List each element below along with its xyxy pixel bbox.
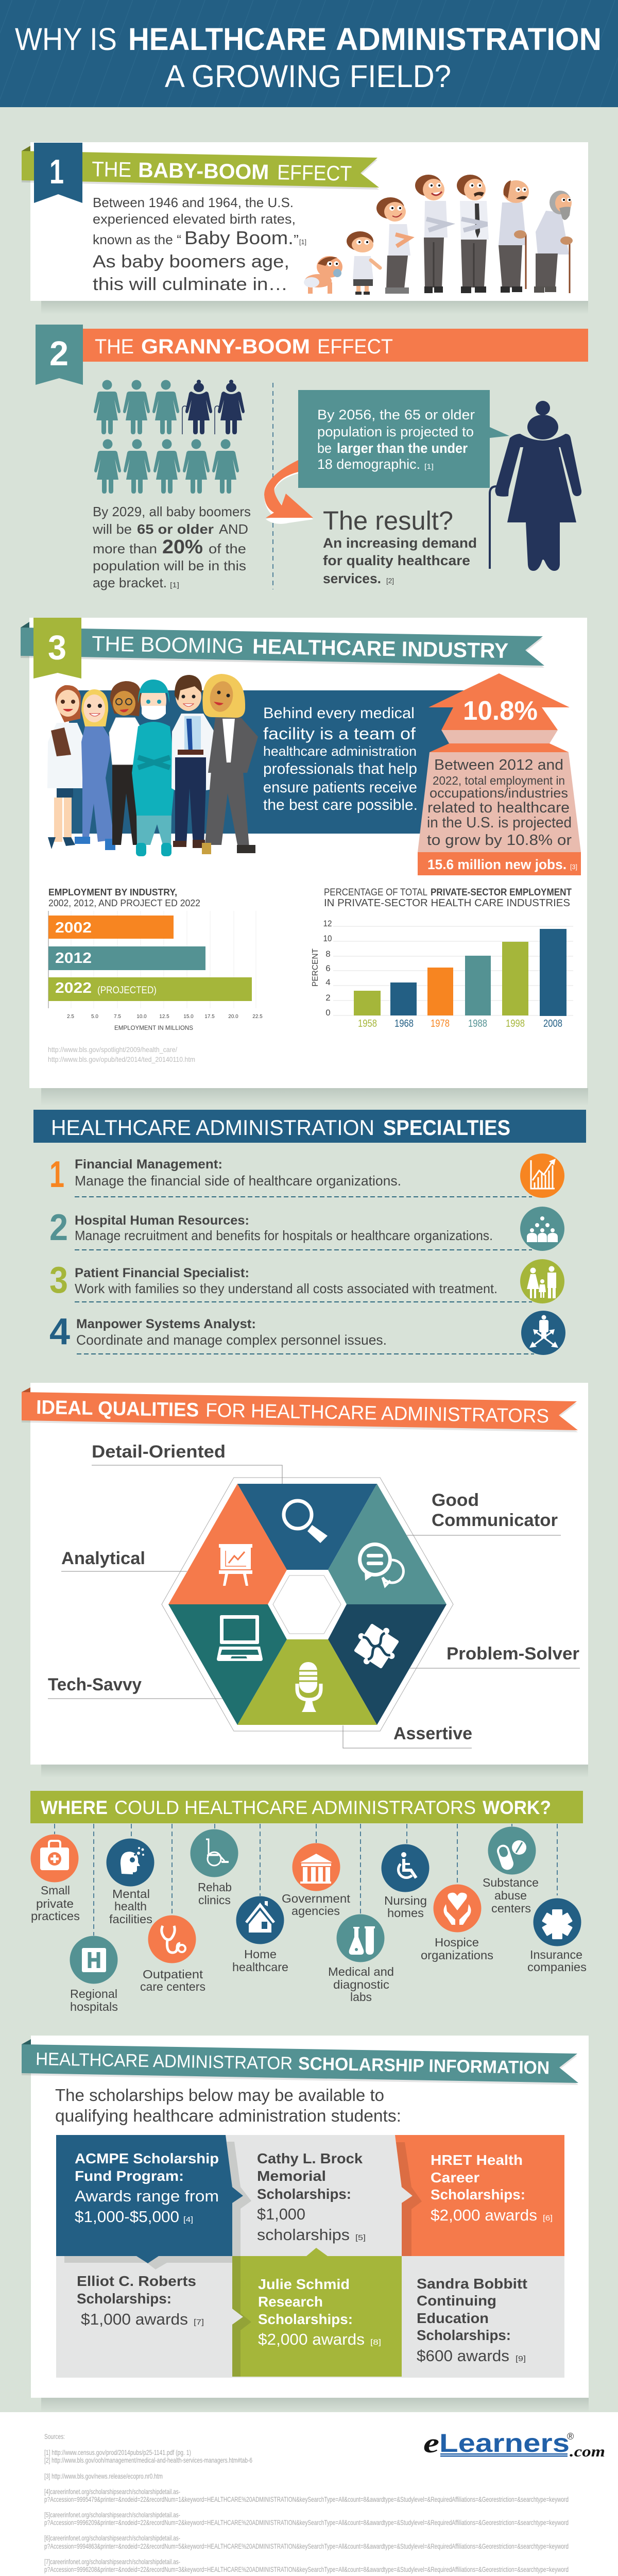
cell: Cathy L. Brock: Scholarships: (257, 2186, 351, 2202)
specialty 2 (49, 1207, 564, 1251)
specialty 4: Manpower Systems Analyst: (76, 1317, 256, 1331)
cell: Julie Schmid: Scholarships: (258, 2311, 353, 2327)
logo: eLearners.com: e (423, 2428, 439, 2459)
arrow: curved orange (264, 460, 313, 524)
ribbon: baby-boom heading: EFFECT (277, 160, 352, 185)
arrow: growth 10.8%: related to healthcare (427, 800, 570, 816)
item: insurance companies: companies (527, 1960, 587, 1974)
blue backdrop with text (69, 690, 465, 834)
chart source links: http://www.bls.gov/spotlight/2009/health_care/ (48, 1045, 177, 1054)
text: by 2029: 65 or older (137, 521, 214, 537)
labels and leader lines: Communicator (432, 1511, 558, 1530)
cell: Sandra Bobbitt: $600 awards (417, 2347, 509, 2365)
cell: Julie Schmid: [8] (370, 2338, 381, 2347)
scholarship grid (56, 2135, 564, 2378)
cell: HRET: [6] (543, 2214, 553, 2223)
cell: ACMPE: $1,000-$5,000 (75, 2208, 179, 2226)
cell: HRET: $2,000 awards (431, 2206, 537, 2224)
text: by 2029: of the (209, 541, 246, 556)
text: by 2029: age bracket. (93, 575, 167, 590)
icon: microphone (297, 1662, 321, 1712)
illustration: medical team (47, 674, 258, 856)
blue backdrop with text: healthcare administration (263, 743, 417, 759)
text: scholarship intro: The scholarships below may be available to (55, 2086, 384, 2105)
ribbon: ideal qualities heading: IDEAL QUALITIES (36, 1397, 199, 1421)
cell: ACMPE (56, 2135, 243, 2263)
blue backdrop with text: Behind every medical (263, 705, 415, 722)
cell: Elliot C. Roberts: Elliot C. Roberts (77, 2273, 196, 2289)
sources: [3] http://www.bls.gov/news.release/ecopro.nr0.htm (44, 2472, 163, 2480)
specialty 2: Manage recruitment and benefits for hospitals or healthcare organizations. (75, 1228, 493, 1243)
sources: Sources: (44, 2432, 65, 2441)
arrow: growth 10.8%: occupations/industries (430, 785, 568, 801)
text: by 2029: By 2029, all baby boomers (93, 504, 251, 519)
arrow: growth 10.8%: 15.6 million new jobs. (427, 857, 566, 872)
heading bar: specialties: SPECIALTIES (383, 1115, 510, 1140)
blue backdrop with text: professionals that help (263, 760, 417, 777)
panel: scholarships (22, 2036, 589, 2412)
item: hospice organizations (421, 1885, 493, 1962)
text: the result: An increasing demand (323, 535, 477, 551)
text: the result: The result? (323, 506, 453, 535)
heading bar: granny-boom: GRANNY-BOOM (141, 335, 310, 358)
cell: HRET: HRET Health (431, 2152, 523, 2168)
item: government agencies: agencies (291, 1904, 340, 1918)
item: home healthcare: Home (244, 1947, 277, 1961)
specialty 1: Financial Management: (75, 1157, 222, 1172)
text: by 2029: 20% (162, 536, 203, 558)
icon: presentation easel (219, 1544, 252, 1586)
text: by 2029: AND (219, 521, 248, 537)
cell: Elliot C. Roberts: [7] (194, 2318, 204, 2327)
labels and leader lines: Analytical (61, 1549, 145, 1568)
title banner: A GROWING FIELD? (165, 59, 451, 94)
item: home healthcare: healthcare (232, 1960, 288, 1974)
bar chart: employment by industry: 2.5 (67, 1014, 74, 1020)
cell: Cathy L. Brock: [5] (355, 2233, 366, 2242)
blue backdrop with text: facility is a team of (263, 724, 416, 743)
cell: ACMPE: ACMPE Scholarship (75, 2150, 219, 2166)
cell: Julie Schmid: $2,000 awards (258, 2330, 365, 2348)
item: regional hospitals: Regional (70, 1987, 117, 2001)
item: mental health facilities: Mental (112, 1887, 150, 1901)
sources: [7]careerinfonet.org/scholarshipsearch/scholarshipdetail.as- (44, 2557, 180, 2566)
icon: laptop (217, 1615, 263, 1661)
specialty 2: 2 (49, 1207, 68, 1248)
ribbon: scholarship heading: SCHOLARSHIP INFORMATION (298, 2054, 550, 2078)
text: the result: for quality healthcare (323, 553, 470, 568)
title banner: HEALTHCARE (128, 22, 327, 57)
bar chart: percentage of private-sector employment: 0 (325, 1008, 331, 1018)
specialty 3: Patient Financial Specialist: (75, 1266, 249, 1280)
cell: Elliot C. Roberts: Scholarships: (77, 2291, 171, 2307)
text: baby boom explanation: this will culminate in… (93, 275, 288, 294)
ribbon: baby-boom heading (22, 146, 379, 190)
icon: puzzle (347, 1617, 406, 1675)
arrow: growth 10.8%: 10.8% (463, 696, 538, 726)
cell: Sandra Bobbitt: Scholarships: (417, 2327, 511, 2343)
cell: Elliot C. Roberts (77, 2273, 204, 2328)
bar chart: percentage of private-sector employment: 1998 (506, 1018, 525, 1029)
item: medical and diagnostic labs (328, 1914, 394, 2004)
bar chart: employment by industry: (PROJECTED) (97, 985, 157, 996)
heading bar: where: COULD HEALTHCARE ADMINISTRATORS (114, 1797, 476, 1818)
heading bar: where (30, 1791, 583, 1823)
callout: by 2056: By 2056, the 65 or older (317, 407, 475, 422)
item: government agencies (282, 1843, 351, 1918)
icon: person with arrows (529, 1315, 558, 1348)
bar chart: employment by industry: 15.0 (183, 1014, 194, 1020)
labels and leader lines: Assertive (393, 1724, 472, 1743)
cell: HRET: Career (431, 2170, 479, 2185)
text: the result: [2] (386, 577, 394, 585)
cell: Julie Schmid: Research (258, 2294, 323, 2310)
specialty 1: 1 (49, 1154, 64, 1195)
ribbon: booming heading: THE BOOMING (92, 632, 244, 658)
ribbon: scholarship heading (22, 2039, 578, 2085)
pictogram: ten women, two elderly (94, 380, 245, 494)
labels and leader lines: Problem-Solver (447, 1644, 579, 1664)
cell: Cathy L. Brock: $1,000 (257, 2205, 305, 2223)
icon: large granny with cane (490, 401, 581, 571)
bar chart: percentage of private-sector employment: 12 (323, 919, 332, 928)
specialty 4 (49, 1311, 565, 1355)
sources: [1] http://www.census.gov/prod/2014pubs/p25-1141.pdf (pg. 1) (44, 2448, 191, 2456)
logo: eLearners.com: .com (570, 2443, 605, 2460)
bar chart: percentage of private-sector employment: 6 (325, 963, 331, 973)
badge: number 2: 2 (49, 334, 68, 373)
cell: Cathy L. Brock (257, 2150, 366, 2244)
bar chart: percentage of private-sector employment: 1988 (468, 1018, 487, 1029)
section: specialties (33, 1110, 586, 1355)
item: substance abuse centers: abuse (494, 1889, 527, 1902)
text: baby boom explanation (93, 195, 306, 294)
item: medical and diagnostic labs: labs (350, 1990, 372, 2004)
bar chart: percentage of private-sector employment: PERCENT (311, 948, 320, 987)
item: small private practices (31, 1834, 80, 1923)
arrow: growth 10.8%: 2022, total employment in (433, 774, 565, 787)
heading bar: specialties (33, 1110, 586, 1143)
cell: Cathy L. Brock: Cathy L. Brock (257, 2150, 363, 2166)
badge: number 3 (33, 618, 81, 679)
badge: number 3: 3 (48, 629, 66, 667)
bar chart: percentage of private-sector employment: IN PRIVATE-SECTOR HEALTH CARE INDUSTRIES (324, 897, 570, 909)
bar chart: employment by industry: 20.0 (228, 1014, 238, 1020)
item: nursing homes (381, 1844, 430, 1920)
cell: Sandra Bobbitt: Sandra Bobbitt (417, 2276, 527, 2292)
arrow: growth 10.8%: [3] (570, 863, 577, 871)
arrow: growth 10.8%: to grow by 10.8% or (427, 832, 572, 849)
text: scholarship intro: qualifying healthcare administration students: (55, 2106, 401, 2125)
cell: Elliot C. Roberts: $1,000 awards (81, 2310, 188, 2328)
bar chart: percentage of private-sector employment: 1968 (394, 1018, 414, 1029)
arrow: growth 10.8%: Between 2012 and (434, 757, 563, 773)
bar chart: percentage of private-sector employment: 4 (325, 977, 331, 987)
callout: by 2056: be (317, 440, 332, 456)
text: baby boom explanation: experienced elevated birth rates, (93, 211, 296, 227)
cell: Sandra Bobbitt: [9] (516, 2354, 526, 2363)
ribbon: baby-boom heading: BABY-BOOM (138, 158, 269, 184)
bar chart: employment by industry: 7.5 (114, 1014, 121, 1020)
specialty 1 (49, 1154, 564, 1198)
text: by 2029: more than (93, 541, 157, 556)
specialty 3: Work with families so they understand all costs associated with treatment. (75, 1281, 497, 1296)
text: by 2029: will be (92, 521, 132, 537)
sources: [6]careerinfonet.org/scholarshipsearch/scholarshipdetail.as- (44, 2534, 180, 2542)
arrow: growth 10.8%: in the U.S. is projected (427, 815, 572, 831)
labels and leader lines: Detail-Oriented (92, 1442, 226, 1462)
text: the result: services. (323, 571, 381, 586)
text: baby boom explanation: Baby Boom. (184, 227, 294, 248)
text: by 2029 (92, 504, 251, 590)
cell: HRET: Scholarships: (431, 2187, 525, 2202)
title banner: ADMINISTRATION (336, 22, 602, 57)
icon: family (527, 1266, 556, 1298)
text: baby boom explanation: [1] (299, 238, 306, 246)
bar chart: employment by industry: 12.5 (159, 1014, 169, 1020)
logo: eLearners.com: Learners (439, 2429, 570, 2458)
ribbon: ideal qualities heading: FOR HEALTHCARE ADMINISTRATORS (205, 1400, 549, 1427)
item: government agencies: Government (282, 1892, 351, 1905)
callout: by 2056 (298, 390, 509, 488)
bar chart: percentage of private-sector employment: 1958 (358, 1018, 377, 1029)
text: the result (323, 506, 477, 586)
icon: rising chart (531, 1159, 556, 1189)
bar chart: percentage of private-sector employment: 10 (323, 934, 332, 943)
title banner: WHY IS (15, 22, 117, 57)
bar chart: employment by industry: EMPLOYMENT IN MILLIONS (114, 1024, 193, 1031)
bar chart: employment by industry: 17.5 (204, 1014, 215, 1020)
cell: Sandra Bobbitt: Education (417, 2310, 489, 2326)
item: substance abuse centers: centers (491, 1902, 531, 1915)
item: mental health facilities (106, 1838, 154, 1926)
specialty 3 (49, 1259, 564, 1303)
cell: Sandra Bobbitt (417, 2276, 527, 2365)
callout: by 2056: 18 demographic. (317, 456, 420, 472)
item: regional hospitals: hospitals (70, 2000, 118, 2013)
heading bar: granny-boom: EFFECT (317, 335, 393, 358)
item: small private practices: private (36, 1897, 74, 1910)
text: baby boom explanation: As baby boomers age, (93, 252, 289, 272)
panel: baby-boom effect (22, 142, 588, 314)
text: baby boom explanation: known as the “ (93, 232, 181, 247)
section: where could administrators work (30, 1791, 587, 2013)
chart source links: http://www.bls.gov/opub/ted/2014/ted_20140110.htm (48, 1055, 195, 1063)
cell: ACMPE: Awards range from (75, 2187, 219, 2205)
item: small private practices: practices (31, 1909, 80, 1923)
illustration: ageing people (304, 175, 573, 295)
bar chart: percentage of private-sector employment: 2 (325, 993, 331, 1003)
item: outpatient care centers: care centers (140, 1980, 205, 1993)
specialty 2: Hospital Human Resources: (75, 1213, 249, 1228)
item: outpatient care centers: Outpatient (143, 1968, 203, 1981)
bar chart: percentage of private-sector employment: 1978 (431, 1018, 450, 1029)
logo: eLearners.com (423, 2428, 605, 2460)
bar chart: employment by industry: 2002, 2012, AND PROJECT ED 2022 (48, 898, 200, 908)
bar chart: employment by industry: 2012 (55, 950, 92, 967)
sources (44, 2432, 569, 2576)
item: regional hospitals (70, 1936, 118, 2013)
item: insurance companies: Insurance (530, 1948, 582, 1961)
item: insurance companies (527, 1898, 587, 1974)
bar chart: percentage of private-sector employment: PRIVATE-SECTOR EMPLOYMENT (431, 887, 572, 898)
specialty 4: Coordinate and manage complex personnel issues. (76, 1332, 387, 1348)
heading bar: specialties: HEALTHCARE ADMINISTRATION (51, 1115, 374, 1140)
heading bar: granny-boom: THE (95, 335, 134, 358)
item: rehab clinics: clinics (198, 1893, 231, 1907)
hexagon diagram (162, 1478, 453, 1731)
logo: eLearners.com: ® (567, 2431, 574, 2442)
cell: Sandra Bobbitt: Continuing (417, 2293, 496, 2309)
item: medical and diagnostic labs: Medical and (328, 1965, 394, 1978)
icon: people pyramid (527, 1216, 558, 1242)
blue backdrop with text: the best care possible. (263, 796, 418, 814)
ribbon: baby-boom heading: THE (92, 157, 132, 181)
callout: by 2056: [1] (424, 462, 434, 470)
item: nursing homes: homes (387, 1906, 424, 1920)
item: outpatient care centers (140, 1916, 205, 1993)
cell: Cathy L. Brock: Memorial (257, 2168, 326, 2184)
bar chart: employment by industry: EMPLOYMENT BY INDUSTRY, (48, 887, 177, 897)
item: rehab clinics (191, 1829, 238, 1907)
cell: ACMPE: Fund Program: (75, 2168, 184, 2184)
section: granny-boom effect (36, 325, 588, 590)
item: substance abuse centers: Substance (483, 1876, 539, 1889)
ribbon: booming heading: HEALTHCARE INDUSTRY (252, 634, 509, 663)
cell: HRET (395, 2135, 564, 2256)
panel: ideal qualities (22, 1383, 588, 1778)
item: rehab clinics: Rehab (198, 1880, 232, 1894)
bar chart: employment by industry: 22.5 (252, 1014, 263, 1020)
text: baby boom explanation: ” (294, 232, 299, 247)
item: small private practices: Small (41, 1884, 70, 1897)
item: nursing homes: Nursing (384, 1894, 427, 1907)
heading bar: granny-boom (83, 329, 588, 362)
text: by 2029: population will be in this (93, 558, 246, 573)
bar chart: percentage of private-sector employment: 2008 (543, 1018, 562, 1029)
bar chart: percentage of private-sector employment (311, 887, 573, 1029)
badge: number 2 (36, 325, 83, 385)
labels and leader lines: Tech-Savvy (48, 1675, 142, 1694)
item: substance abuse centers (483, 1827, 539, 1915)
cell: Julie Schmid (232, 2248, 402, 2377)
callout: by 2056: larger than the under (337, 440, 468, 456)
labels and leader lines: Good (432, 1490, 479, 1510)
bar chart: percentage of private-sector employment: PERCENTAGE OF TOTAL (324, 887, 427, 898)
labels and leader lines (48, 1442, 580, 1748)
item: hospice organizations: Hospice (435, 1936, 479, 1949)
cell: Julie Schmid: Julie Schmid (258, 2276, 350, 2292)
item: medical and diagnostic labs: diagnostic (333, 1978, 389, 1991)
title banner (0, 0, 618, 107)
ribbon: booming heading (21, 622, 544, 668)
sources: [2] http://www.bls.gov/ooh/management/medical-and-health-services-managers.htm#tab-6 (44, 2456, 252, 2464)
item: home healthcare (232, 1896, 288, 1974)
item: mental health facilities: facilities (109, 1912, 152, 1926)
sources: [5]careerinfonet.org/scholarshipsearch/scholarshipdetail.as- (44, 2511, 180, 2519)
arrow: growth 10.8% (418, 673, 581, 875)
specialty 3: 3 (49, 1260, 68, 1301)
icon: speech bubbles (358, 1543, 403, 1586)
badge: number 1 (34, 143, 82, 203)
heading bar: where: WHERE (41, 1797, 108, 1818)
callout: by 2056: population is projected to (317, 424, 474, 439)
text: scholarship intro (55, 2086, 401, 2125)
specialty 4: 4 (49, 1311, 70, 1352)
item: hospice organizations: organizations (421, 1948, 493, 1962)
ribbon: scholarship heading: HEALTHCARE ADMINISTRATOR (36, 2049, 293, 2074)
text: baby boom explanation: Between 1946 and 1964, the U.S. (93, 195, 294, 210)
bar chart: employment by industry: 10.0 (136, 1014, 147, 1020)
cell: ACMPE: [4] (183, 2215, 193, 2224)
text: by 2029: [1] (170, 581, 179, 589)
heading bar: where: WORK? (483, 1797, 551, 1818)
sources: [4]careerinfonet.org/scholarshipsearch/scholarshipdetail.as- (44, 2487, 180, 2496)
bar chart: employment by industry (48, 887, 263, 1031)
blue backdrop with text: ensure patients receive (263, 779, 417, 796)
specialty 1: Manage the financial side of healthcare organizations. (75, 1173, 401, 1189)
bar chart: employment by industry: 5.0 (91, 1014, 98, 1020)
bar chart: employment by industry: 2022 (55, 980, 92, 996)
panel: booming healthcare industry (21, 618, 588, 1106)
chart source links (48, 1045, 195, 1063)
icon: magnifier (284, 1501, 328, 1543)
item: mental health facilities: health (114, 1900, 147, 1913)
ribbon: ideal qualities heading (22, 1387, 578, 1432)
cell: Cathy L. Brock: scholarships (257, 2226, 350, 2244)
badge: number 1: 1 (49, 152, 64, 191)
bar chart: employment by industry: 2002 (55, 920, 92, 936)
bar chart: percentage of private-sector employment: 8 (325, 949, 331, 959)
